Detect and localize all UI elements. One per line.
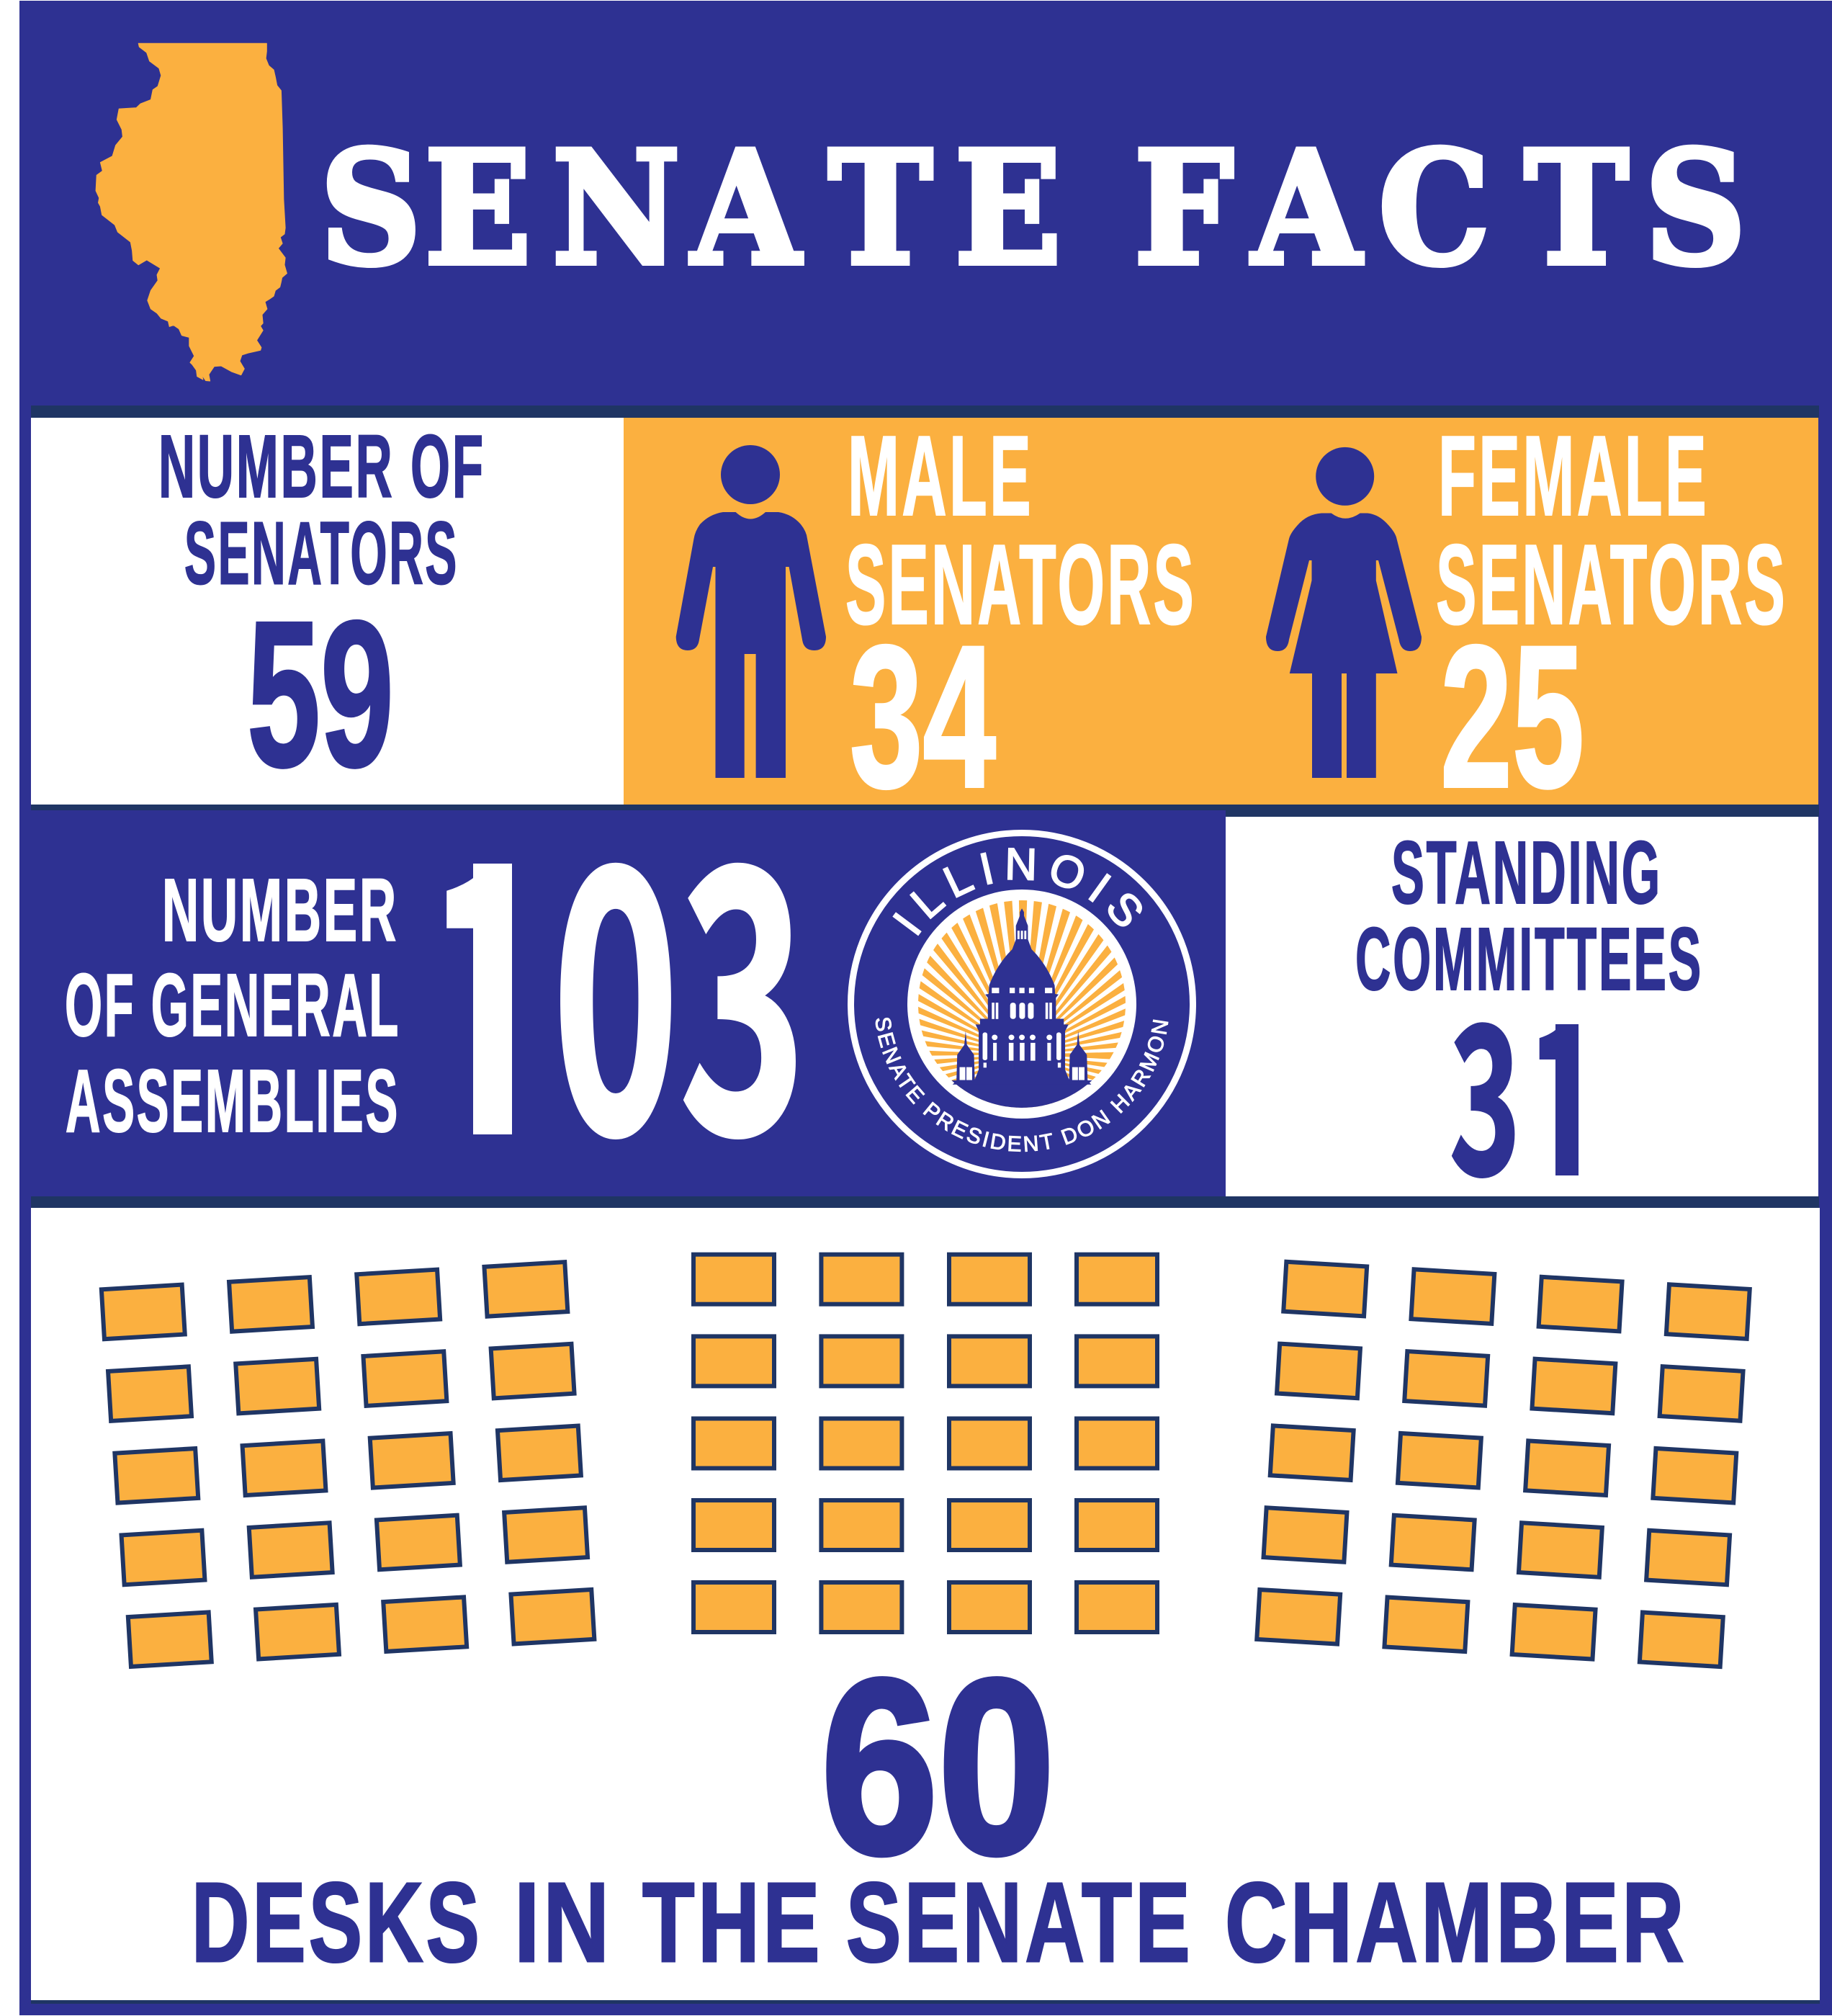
label: desks in the senate chamber <box>192 1860 1687 1986</box>
heading: number of senators: NUMBER OF <box>158 418 485 516</box>
number: 34: 34 <box>850 604 997 830</box>
label: male senators: SENATORS <box>845 521 1196 648</box>
seal text: Senate President Don Harmon: SENATE PRESIDENT DON HARMON <box>876 1017 1169 1152</box>
header divider bar <box>31 406 1819 418</box>
capitol building <box>953 908 1091 1085</box>
panel: senate chamber desks <box>31 1208 1820 2004</box>
panel: number of general assemblies <box>19 711 1226 1237</box>
label: number: NUMBER <box>162 861 398 960</box>
row divider bar <box>31 805 1819 810</box>
panel: male and female senators <box>624 413 1818 830</box>
number: 31 <box>1450 937 1610 1233</box>
row divider bar <box>31 1196 1819 1208</box>
icon: Illinois state map <box>96 43 287 381</box>
heading line: senators: SENATORS <box>184 504 459 604</box>
number: 103: 103 <box>425 711 807 1237</box>
number: 60: 60 <box>821 1629 1055 1906</box>
center desk block <box>693 1255 1157 1632</box>
label: desks in the senate chamber: THE <box>642 1860 823 1986</box>
panel: number of senators <box>31 418 624 810</box>
label: of general: OF GENERAL <box>65 957 400 1055</box>
label: desks in the senate chamber: DESKS <box>192 1860 482 1986</box>
right desk block <box>1257 1262 1750 1667</box>
label: desks in the senate chamber: SENATE <box>846 1860 1193 1986</box>
icon: Illinois Senate President seal <box>848 830 1196 1178</box>
label: assemblies: ASSEMBLIES <box>66 1052 400 1151</box>
icon: female figure <box>1266 447 1422 778</box>
left desk block <box>102 1262 594 1667</box>
number: 103 <box>425 711 807 1237</box>
label: male: MALE <box>848 413 1033 539</box>
icon: male figure <box>676 445 826 778</box>
seal text: Illinois: ILLINOIS <box>892 848 1142 936</box>
number: 31: 31 <box>1450 937 1605 1233</box>
number: 25: 25 <box>1440 604 1584 830</box>
panel: standing committees <box>1226 810 1819 1233</box>
title: SENATE FACTS <box>320 117 1746 300</box>
label: desks in the senate chamber: CHAMBER <box>1225 1860 1687 1986</box>
label: desks in the senate chamber: IN <box>514 1860 613 1986</box>
number: 59: 59 <box>247 578 394 810</box>
